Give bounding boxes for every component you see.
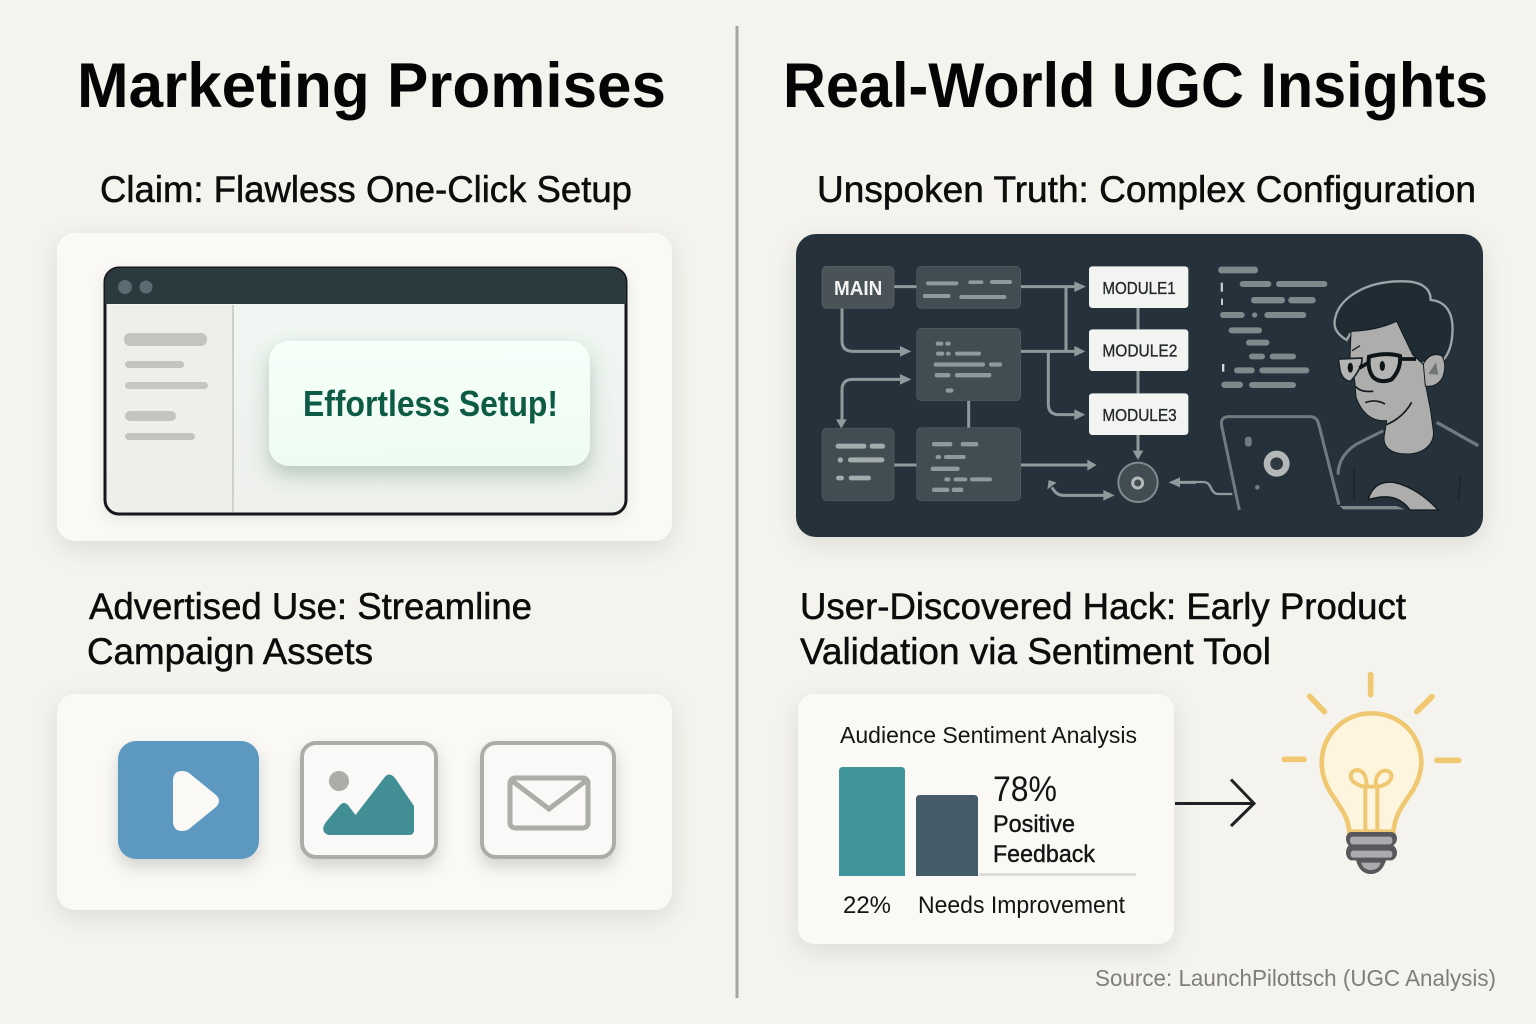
icon: image (302, 743, 436, 857)
code box 1 (917, 266, 1021, 308)
heading: user-discovered hack: User-Discovered Hack: Early Product (800, 586, 1407, 627)
app window (105, 268, 626, 514)
center divider (736, 26, 738, 998)
heading: claim: Claim: Flawless One-Click Setup (100, 169, 632, 210)
code box 4 (917, 428, 1021, 501)
title: Real-World UGC Insights: Real-World UGC Insights (783, 51, 1488, 121)
box: MODULE2 (1089, 329, 1188, 371)
callout: effortless setup: Effortless Setup! (303, 383, 558, 424)
laptop (1190, 417, 1405, 510)
stat: 78% positive feedback: Feedback (993, 841, 1096, 868)
panel: one-click setup window (57, 233, 672, 541)
panel: campaign asset icons (57, 694, 672, 910)
stat: 78% positive feedback: Positive (993, 811, 1075, 838)
stat: 78% positive feedback (993, 770, 1096, 868)
box: MODULE3: MODULE3 (1102, 405, 1177, 425)
panel: audience sentiment analysis (798, 694, 1174, 944)
connectors (842, 287, 1196, 495)
code box 3 (822, 428, 894, 501)
stat: 22% needs improvement: 22% (843, 892, 891, 919)
flow diagram (822, 266, 1196, 502)
heading: unspoken truth: Unspoken Truth: Complex Configuration (817, 169, 1476, 210)
box: MODULE2: MODULE2 (1102, 341, 1177, 361)
icon: email (482, 743, 614, 857)
icon: video play (118, 741, 259, 859)
code lines and developer (1190, 267, 1478, 510)
box: MODULE3 (1089, 393, 1188, 435)
source note: Source: LaunchPilottsch (UGC Analysis) (1095, 965, 1496, 991)
code box 2 (917, 328, 1021, 401)
heading: user-discovered hack: Validation via Sentiment Tool (800, 631, 1271, 672)
arrow to lightbulb (1175, 780, 1254, 826)
stat: 22% needs improvement: Needs Improvement (918, 892, 1125, 919)
bar chart (839, 767, 1136, 876)
code lines (1218, 267, 1327, 388)
stat: 78% positive feedback: 78% (993, 770, 1057, 809)
heading: advertised use: Advertised Use: Streamline (89, 586, 532, 627)
chart title: Audience Sentiment Analysis (840, 722, 1137, 748)
heading: advertised use: Campaign Assets (87, 631, 373, 672)
box: MODULE1: MODULE1 (1102, 278, 1176, 298)
developer illustration (1335, 281, 1478, 510)
callout: effortless setup (269, 341, 590, 466)
box: MAIN: MAIN (834, 278, 882, 300)
title: Marketing Promises: Marketing Promises (77, 51, 666, 121)
box: MAIN (822, 266, 894, 308)
hub gear (1118, 463, 1158, 502)
panel: complex configuration diagram (796, 234, 1483, 537)
box: MODULE1 (1089, 266, 1188, 308)
icon: lightbulb (1284, 675, 1459, 874)
